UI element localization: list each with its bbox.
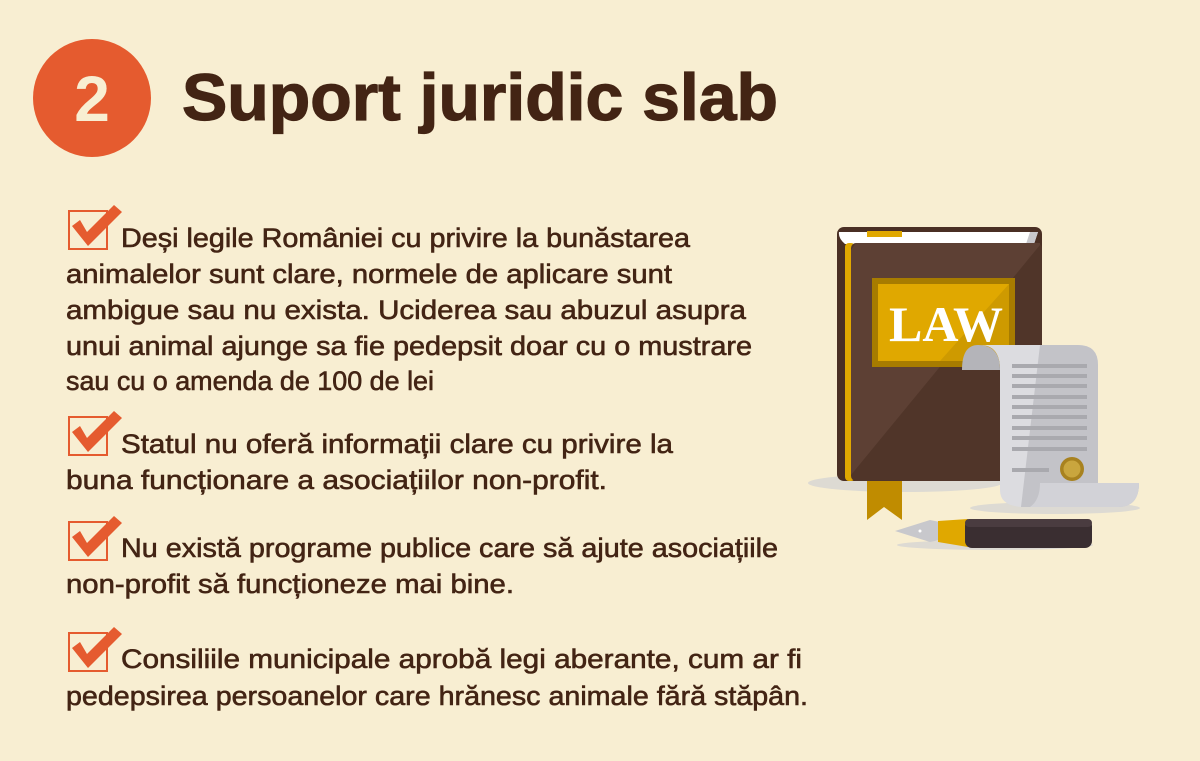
pen bbox=[895, 519, 1092, 548]
bookmark ribbon bbox=[867, 481, 902, 520]
pen shadow bbox=[897, 540, 1093, 550]
point 2: buna funcționare a asociațiilor non-profit. bbox=[66, 465, 607, 495]
point 3: Nu există programe publice care să ajute asociațiile bbox=[121, 533, 778, 563]
point 4: pedepsirea persoanelor care hrănesc animale fără stăpân. bbox=[66, 681, 808, 711]
point 1 bbox=[66, 205, 752, 396]
checkbox icon 2 bbox=[69, 411, 122, 455]
checkbox icon 3 bbox=[69, 516, 122, 560]
point 1: sau cu o amenda de 100 de lei bbox=[66, 366, 434, 396]
point 1: animalelor sunt clare, normele de aplicare sunt bbox=[66, 259, 673, 289]
point 1: unui animal ajunge sa fie pedepsit doar cu o mustrare bbox=[66, 331, 752, 361]
title: Suport juridic slab bbox=[182, 60, 778, 134]
point 1: Deși legile României cu privire la bunăstarea bbox=[121, 223, 691, 253]
checkbox icon 1 bbox=[69, 205, 122, 249]
checkbox icon 4 bbox=[69, 627, 122, 671]
book bbox=[837, 227, 1042, 520]
point 3: non-profit să funcționeze mai bine. bbox=[66, 569, 514, 599]
point 4: Consiliile municipale aprobă legi aberante, cum ar fi bbox=[121, 644, 802, 674]
point 2: Statul nu oferă informații clare cu privire la bbox=[121, 429, 674, 459]
point 3 bbox=[66, 516, 778, 599]
seal bbox=[1060, 457, 1084, 481]
scroll bbox=[962, 345, 1139, 507]
point 2 bbox=[66, 411, 674, 495]
point 1: ambigue sau nu exista. Uciderea sau abuzul asupra bbox=[66, 295, 747, 325]
number badge: 2 bbox=[74, 63, 110, 135]
number badge bbox=[33, 39, 151, 157]
LAW plate bbox=[872, 278, 1015, 367]
book shadow bbox=[808, 474, 1002, 492]
scroll shadow bbox=[970, 502, 1140, 514]
point 4 bbox=[66, 627, 808, 711]
illustration: law book, scroll and pen bbox=[808, 227, 1140, 550]
LAW plate: LAW bbox=[889, 296, 1003, 352]
